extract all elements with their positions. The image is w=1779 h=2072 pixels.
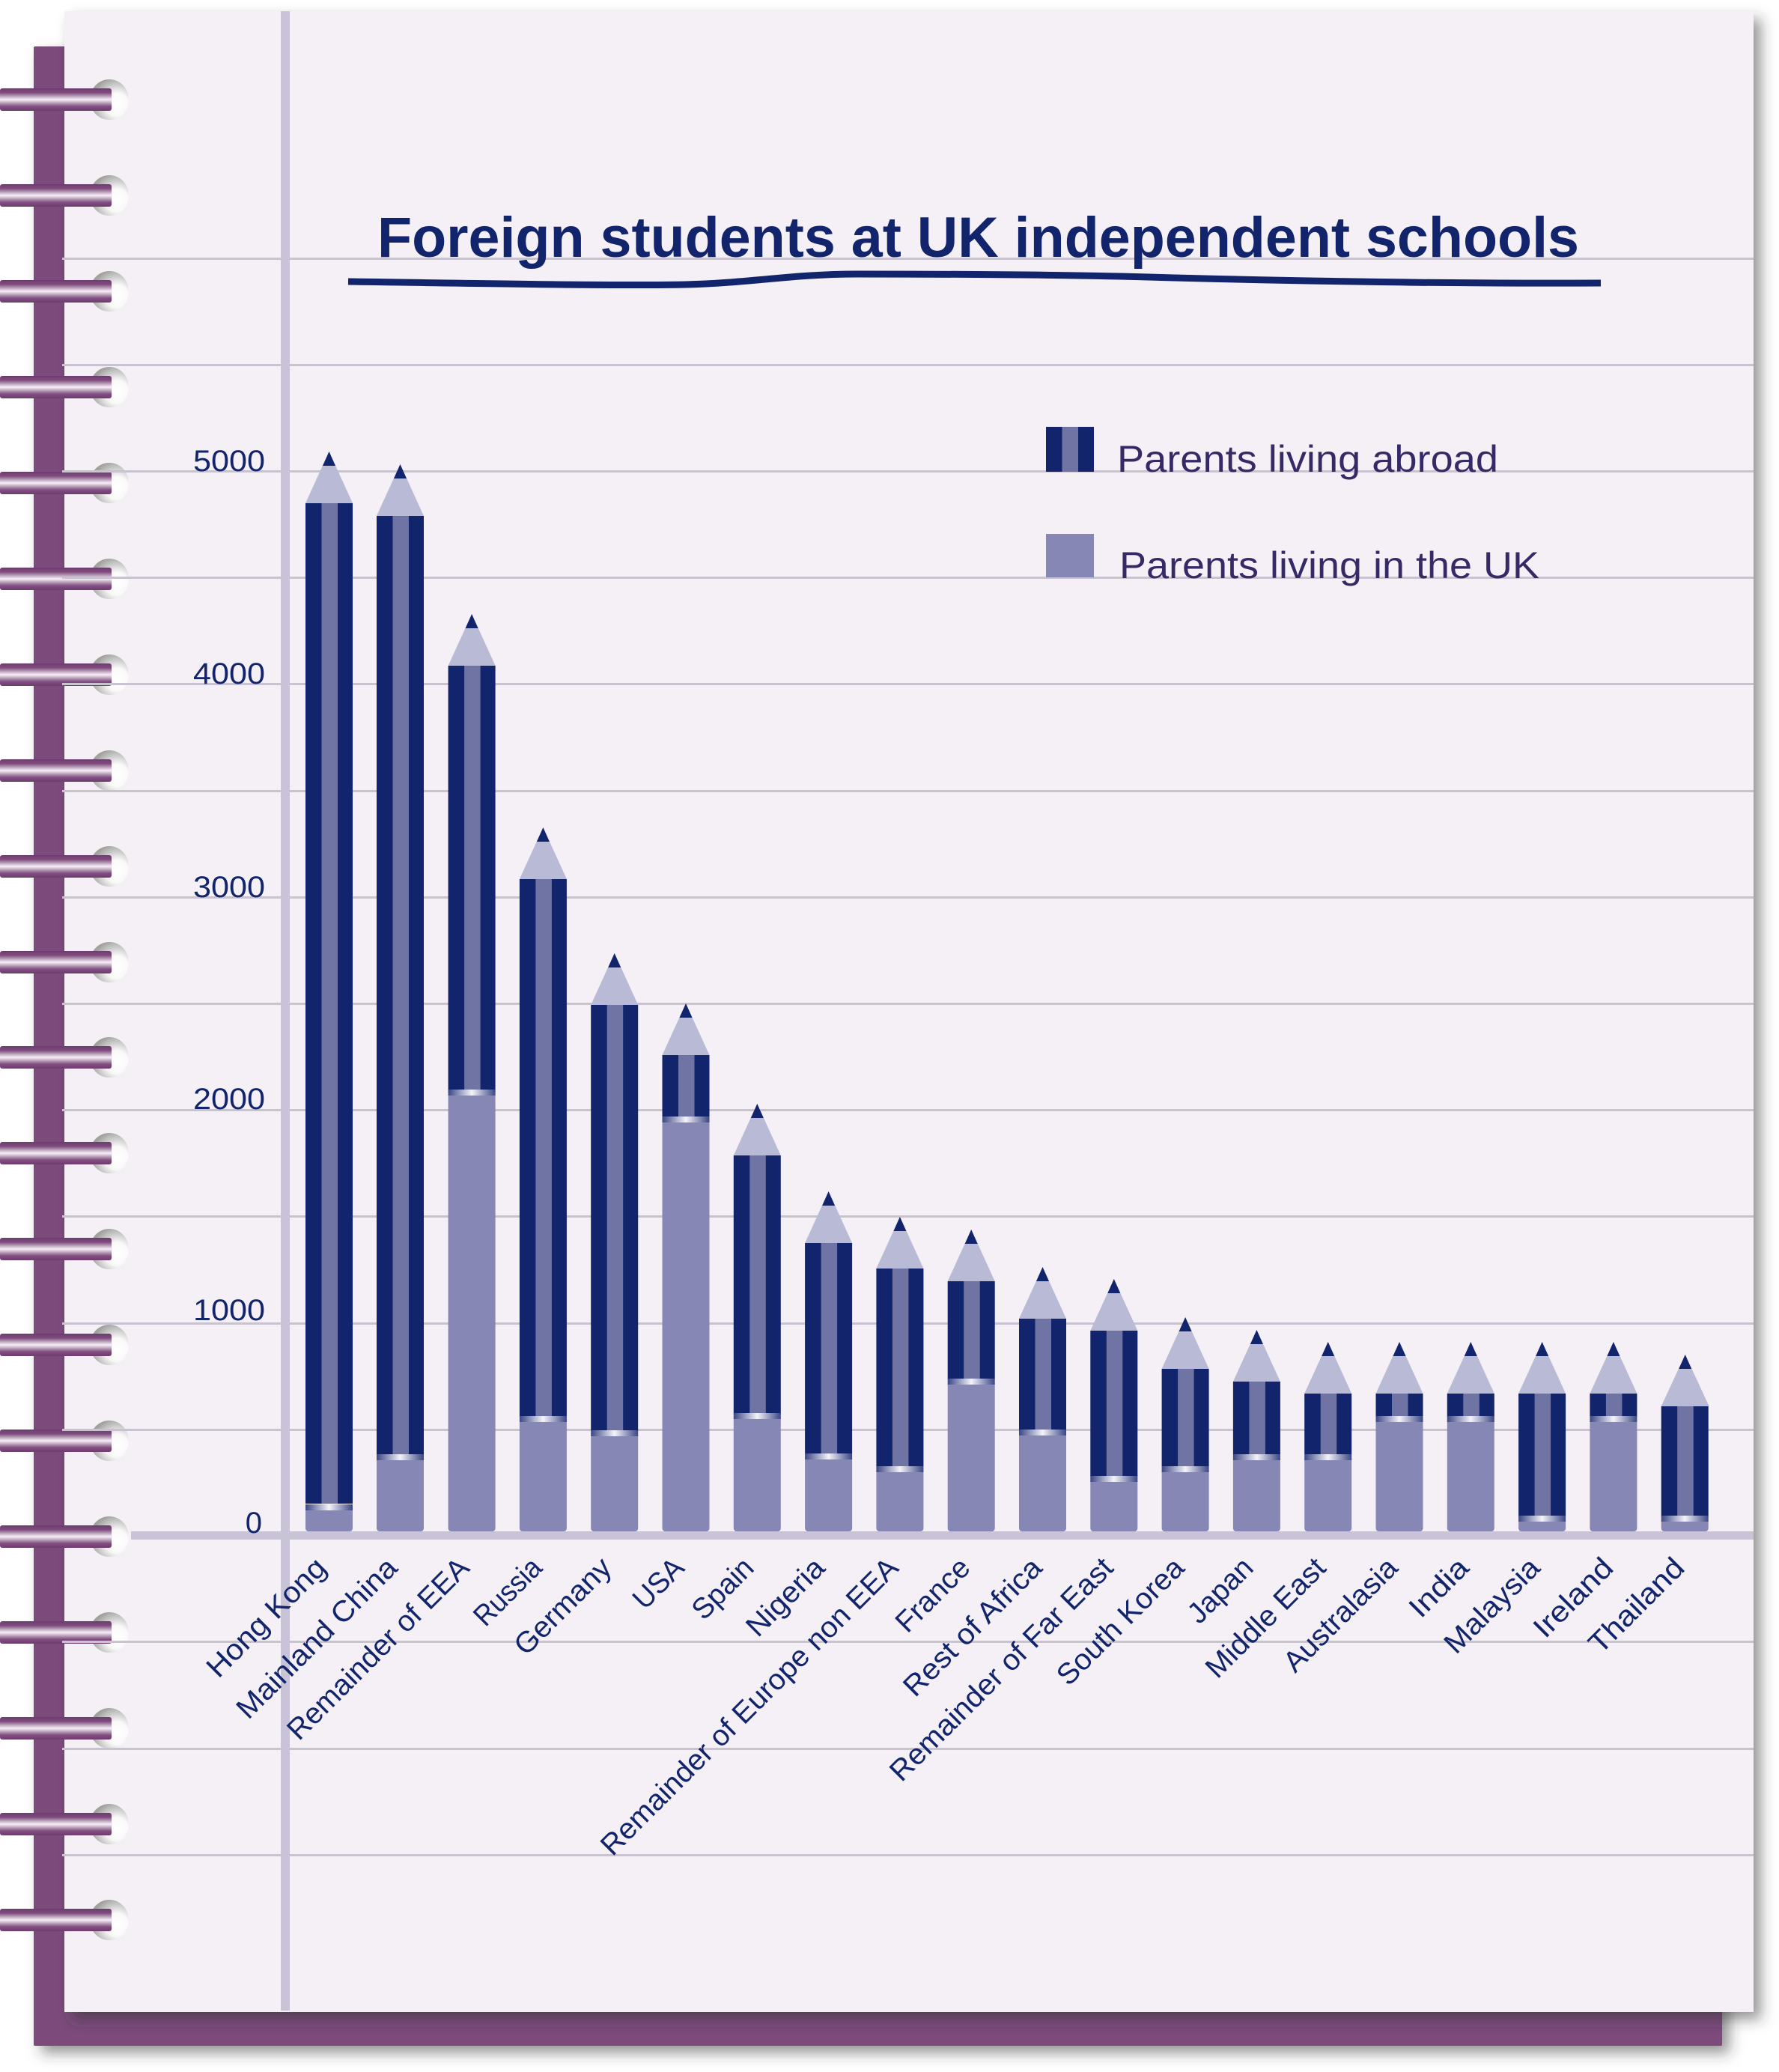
pencil: Remainder of Europe non EEA [876, 1217, 923, 1531]
pencil: India [1447, 1342, 1494, 1531]
y axis labels: 4000 [193, 657, 265, 690]
pencil: Australasia [1376, 1342, 1423, 1531]
y axis labels: 2000 [193, 1083, 265, 1116]
y axis labels: 5000 [193, 445, 265, 478]
country labels: Germany [508, 1552, 618, 1662]
country labels: Thailand [1582, 1552, 1691, 1660]
country labels: Middle East [1199, 1552, 1332, 1684]
country labels: Malaysia [1438, 1552, 1547, 1660]
country labels: Hong Kong [201, 1552, 332, 1684]
pencil: Thailand [1661, 1355, 1709, 1531]
pencil: Mainland China [377, 464, 424, 1531]
pencil: Japan [1233, 1330, 1280, 1531]
title: Foreign students at UK independent schools [377, 206, 1579, 270]
country labels: Nigeria [740, 1552, 832, 1643]
legend swatch: parents living abroad [1046, 427, 1094, 472]
pencil: Russia [520, 827, 567, 1531]
country labels: USA [627, 1552, 690, 1616]
pencil: South Korea [1162, 1317, 1209, 1531]
legend swatch: parents living in the UK [1046, 534, 1094, 577]
country labels: Japan [1182, 1552, 1259, 1630]
country labels [201, 1552, 1691, 1862]
country labels: India [1402, 1552, 1476, 1624]
country labels: Mainland China [230, 1552, 404, 1725]
country labels: France [890, 1552, 976, 1639]
pencil: France [948, 1230, 995, 1531]
country labels: Remainder of EEA [281, 1552, 475, 1746]
pencil: USA [662, 1003, 710, 1531]
country labels: Rest of Africa [897, 1552, 1049, 1703]
pencil: Malaysia [1518, 1342, 1566, 1531]
pencil bar chart [305, 452, 1709, 1531]
y axis labels: 3000 [193, 871, 265, 904]
legend label: parents living abroad: Parents living abroad [1117, 438, 1498, 480]
pencil: Spain [734, 1104, 781, 1531]
country labels: Ireland [1527, 1552, 1620, 1644]
pencil: Ireland [1590, 1342, 1637, 1531]
pencil: Remainder of EEA [448, 614, 496, 1531]
country labels: South Korea [1050, 1552, 1191, 1692]
title wavy underline [348, 274, 1601, 285]
pencil: Remainder of Far East [1090, 1279, 1137, 1531]
legend label: parents living in the UK: Parents living in the UK [1119, 544, 1539, 586]
pencil: Hong Kong [305, 452, 353, 1531]
y axis labels [193, 445, 265, 1540]
y axis labels: 1000 [193, 1294, 265, 1327]
pencil: Rest of Africa [1019, 1267, 1066, 1531]
y axis labels: 0 [246, 1507, 262, 1540]
spiral binding rings [0, 88, 112, 1931]
page margin line [281, 11, 290, 2011]
pencil: Middle East [1304, 1342, 1351, 1531]
spiral binding holes [90, 79, 129, 1940]
country labels: Remainder of Far East [884, 1552, 1119, 1787]
pencil: Germany [591, 953, 638, 1531]
country labels: Spain [686, 1552, 760, 1626]
pencil: Nigeria [805, 1191, 852, 1531]
country labels: Russia [467, 1552, 549, 1632]
chart baseline axis [131, 1531, 1754, 1540]
legend [1046, 427, 1539, 586]
country labels: Australasia [1277, 1552, 1405, 1679]
country labels: Remainder of Europe non EEA [594, 1552, 904, 1862]
